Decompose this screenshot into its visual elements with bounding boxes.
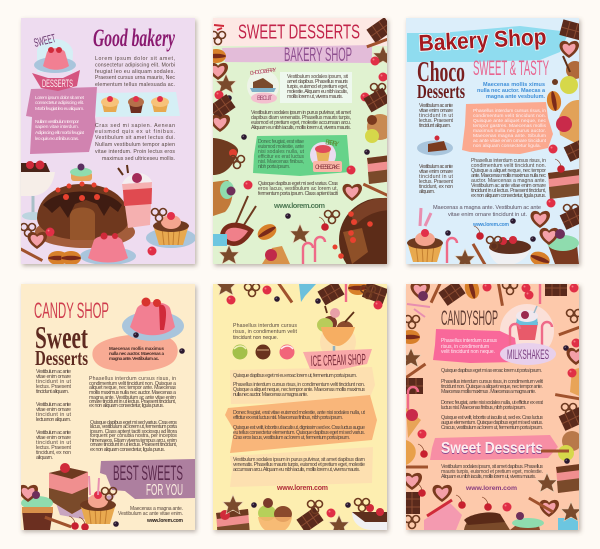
left text columns: Vestibulum ac ante [36,402,71,408]
sweet desserts badge: SWEET [32,31,57,50]
body text: Quisque dapibus eget mi as eroac lorem ut porta ipsum. [441,368,542,374]
berry [179,348,185,354]
body text: Quisque a aliquet neque, nec tempor [471,168,546,174]
right food border [536,308,579,493]
heading: candy shop: CANDY SHOP [34,298,109,323]
top text [233,323,298,341]
heading: best sweets for you: FOR YOU [146,482,183,499]
right food border [285,18,387,231]
left text two: vitae enim ornare [419,169,453,175]
lower text: mauris turpis, euismod et pretium eget, molestie. [441,469,543,475]
title: Good bakery: Good bakery [93,25,176,52]
text on green [258,139,305,170]
right text columns: lacus, vestibulum ac lorem ut, fermentum porta [90,424,177,430]
green brush panel [253,135,350,176]
right text columns: torquent per conubia nostra, per inceptos [90,433,177,439]
text on green: nibh porta ipsum. [258,164,290,170]
left text columns: vitae enim ornare [36,435,71,441]
callout text: magna ante. Vestibulum ac. [109,356,159,361]
poster: Candy Shop [18,284,195,531]
paragraph one: Vestibulum sodales ipsum in purus pulvinar, sit amet [251,110,352,116]
right text columns: ornare tincidunt in ut lectus. Praesent tincidunt, [89,399,176,405]
paragraph one: euismod et pretium eget, molestie accumsan arcu. [251,120,351,126]
right text columns: ex non aliquam consectetur, ligula purus. [89,403,164,409]
url: www.lorem.com [472,222,510,228]
mauve band [222,45,372,63]
body text: luctus nisl. Maecenas finibus, nibh porta ipsum. [441,405,526,411]
left text two: tincidunt in ut [419,174,454,180]
body text: condimentum velit tincidunt non. [471,163,546,169]
bottom food border [216,494,387,530]
white brush text: Morbi feugiat leo eu aliquam. [35,106,84,112]
paragraph one: Aliquam eu nibh iaculis, mollis lorem ut, viverra mauris. [251,125,351,131]
pink brush [433,329,518,363]
white brush text: consectetur adipiscing elit. [35,100,84,106]
centre paragraph [433,205,541,218]
white text on orange: non aliquam consectetur ligula. [473,143,541,149]
text: top box: turpis, euismod et pretium eget, [287,84,348,90]
white brush text: Phasellus interdum cursus [441,338,498,344]
intro text: elementum tellus malesuada ac. [95,82,175,88]
blue callout text [477,82,546,100]
body text [471,158,546,199]
cake slice on plate [417,136,453,156]
text on green: efficitur ex erat luctus [258,154,304,160]
white brush text: velit tincidunt non neque. [441,349,495,355]
white brush text [441,338,498,355]
text: top box: Vestibulum sodales ipsum, sit [287,74,349,80]
white text on orange [473,108,547,149]
centre paragraph: vitae enim ornare tincidunt in ut. [448,212,527,218]
poster: Ice Cream Shop: ICE CREAM SHOP [311,351,366,370]
white text on orange: ac ante vitae enim ornare tincidunt [473,138,547,144]
title: bakery shop: Bakery Shop [418,23,547,56]
body text blocks: accumsan arcu. Aliquam eu nibh iaculis, mollis lorem ut, viverra mauris. [233,467,360,473]
left text columns: Vestibulum ac ante [36,430,71,436]
text on green: nisl. Maecenas finibus, [258,159,304,165]
poster: Good bakery [17,18,196,265]
body text [441,368,544,431]
layer cake and treats [18,463,119,531]
right text columns: magna ante. Vestibulum ac ante vitae enim [89,395,176,401]
body text blocks: Quisque dapibus eget mi eu eroac lorem ut, fermentum porta ipsum. [233,373,357,379]
top food border [216,284,387,310]
subtitle: bakery shop: BAKERY SHOP [284,45,352,66]
cupcakes row [101,96,169,113]
mauve brush [100,459,195,499]
left food border [206,25,325,268]
poster: Candyshop [400,277,590,531]
second text: Vestibulum sit amet lectus dui. [95,135,175,141]
badge: choco berry biscuit: CHOCO·BERRY [249,67,277,77]
top text: risus, in condimentum velit [233,329,298,335]
poster: Sweet Desserts [212,18,391,268]
milkshakes lozenge [500,343,556,365]
intro text: Praesent cursus urna mauris, Nec [95,75,175,81]
pudding on plate [122,298,184,341]
poster: Candy Shop: BEST SWEETS [113,462,183,485]
heading: choco desserts [417,56,465,103]
left text two: Vestibulum ac ante [419,164,453,170]
poster: Candyshop: CANDYSHOP [441,307,498,330]
second text: maximus sed ultriceseu mollis. [102,156,175,162]
left text columns: lectusnon aliquam. [36,417,71,423]
body text: Phasellus interdum cursus risus, in [471,158,546,164]
heading: sweet desserts: Sweet [35,319,88,355]
text: top box: molestie. Aliquam eu nibh iaculis, [287,89,348,95]
white brush text: sapien vitae interdum. [35,124,79,130]
heading: sweet desserts: Sweet Desserts [441,440,543,457]
second text: euismod quis ex ut finibus. [95,129,175,135]
body text blocks: Phasellus interdum cursus risus, in condimentum velit tincidunt non. [233,382,365,388]
white text box [280,72,352,103]
top pink header [213,18,387,46]
left text columns: tincidunt aliquam. [36,389,69,395]
body text blocks [233,373,366,473]
body text: ante. Maecenas mollis maximus nulla nec [471,173,546,179]
body text: tincidunt in ut lectus. Praesent tincidunt, [471,188,546,194]
second text: vitae interdum. Proin lectus eros [95,149,175,155]
bundt cake [35,182,135,248]
cookies and treats [17,224,157,265]
body text: auctor. Maecenas a magna ante. [471,178,546,184]
left text columns: lectus. Praesent [36,384,72,390]
left text columns: lectus. Praesent [36,445,72,451]
right text columns: himenaeos. Etiam viverra tempus arcu, enim [90,438,177,444]
paragraph two [258,181,338,197]
poster: Candyshop: MILKSHAKES [507,346,549,362]
orange brush panel [462,102,553,154]
white brush text: Nullam vestibulum tempor [35,119,79,125]
left text one: lectus. Praesent [419,118,454,124]
badge: choco berry biscuit: BISCUIT [257,96,272,102]
right text columns [89,376,177,453]
poster: Bakery Shop [406,18,590,269]
body text: Vestibulum ac ante vitae enim ornare [471,183,546,189]
paragraph two: eros lacus, vestibulum ac lorem ut, [258,186,338,192]
left text one [419,103,454,129]
blue callout text: nulla nec auctor. Maecas a [477,88,546,94]
right text columns: mollis maximus nulla nec auctor. Maecenas a [89,390,176,396]
white brush text [35,95,85,142]
left text two: aliquam. [419,189,435,195]
white brush text: Lorem ipsum dolor sit amet [35,95,85,101]
text: top box: amet dapibus. Phasellus mauris [287,79,348,85]
badge: berry cheesecake: CHEESECAKE [315,165,340,171]
right food border [530,19,579,230]
pink brush panel [26,87,97,154]
paragraph one: dapibus diam venenatis. Phasellus mauris turpis, [251,115,351,121]
text: top box [287,74,349,100]
intro text: feugiat leo eu aliquam sodales. [95,69,175,75]
pudding front [80,232,136,265]
white brush text: leo quis ex ut finibus cras. [35,136,79,142]
right text columns: ornare tincidunt in ut lectus. Praesent tincidunt, [90,442,177,448]
orange brush [225,395,377,453]
white brush text: Adipiscing elit morbi feugiat [35,130,85,136]
left text columns: Vestibulum ac ante [36,369,71,375]
small green cake [70,164,92,181]
left text one: vitae enim ornare [419,108,453,114]
left text columns: vitae enim ornare [36,407,71,413]
left text columns: tincidunt in ut [36,379,72,385]
peach blob [92,334,178,372]
heading: sweet desserts [35,319,88,370]
body text: Phasellus interdum cursus risus, in condimentum velit [441,379,544,385]
body text: Quisque est velit, lobortis ut iaculis ut, sed ex. Cras luctus [441,415,543,421]
sweet desserts badge: DESSERTS [42,78,73,90]
left text two: lectus. Praesent [419,179,454,185]
white text on orange: Quisque ante aliquet neque, nec [473,118,547,124]
pink brush: sweet desserts [430,435,558,460]
centre paragraph: Maecenas a magna ante. Vestibulum ac ante [433,205,541,211]
bottom food border [407,208,579,269]
ice cream balls [232,344,294,360]
title: sweet desserts: SWEET DESSERTS [238,22,360,44]
right text columns: ipsum. Class aptent taciti sociosqu ad litora [90,429,177,435]
white text on orange: Maecenas magna ante. Sibulum [473,133,546,139]
second text: Nullam vestibulum tempor apien [95,142,175,148]
second text [95,123,175,162]
left text columns: tincidunt, ex non [36,450,71,456]
ice cream shop banner [303,349,372,370]
left text columns: aliquam. [36,455,53,461]
blue callout text: magna ante vesbulum. [486,94,545,100]
left text two: tincidunt, ex non [419,184,453,190]
lower text: Aliquam eu nibh iaculis, mollis lorem ut, viverra mauris. [441,474,536,480]
second text: Cras sed mi sapien. Aenean [95,123,175,129]
body text: Maecenas mollis maximus . Maecenas a magna ante. [441,389,536,395]
body text blocks: Donec feugiat, erat vitae euismod molestie, ante nisi sodales nulla, ut [233,410,366,416]
blue brush header [407,26,569,62]
white text on orange: Phasellus interdum cursus risus, in [473,108,546,114]
bottom text [118,506,183,517]
heading: choco desserts: Choco [417,56,465,88]
bottom text: Maecenas a magna ante. [130,506,183,512]
left text one: tincidunt aliquam. [419,123,451,129]
badge: choco berry biscuit [247,67,279,104]
badge: berry cheesecake: BERRY [325,139,340,148]
body text blocks: Quisque est velit, lobortis ut iaculis ut, dignissim sed ex. Cras luctus augue [233,425,365,431]
body text: ex non aliquam consectetur, ligula purus. [471,193,546,199]
left text one: tincidunt in ut [419,113,454,119]
text on green: nisi sodales nulla, ut [258,149,305,155]
light brush [230,367,375,404]
ice cream sundae [317,306,356,360]
body text blocks: Vestibulum sodales ipsum in purus pulvinar, sit amet dapibus diam [233,457,365,463]
heading: best sweets for you [113,462,183,499]
right text columns: condimentum velit tincidunt non. Quisque a [89,381,176,387]
body text: augue elementum. Quisque dapibus eget mi sed varius. [441,420,543,426]
paragraph two: fermentum porta ipsum. Class aptent taciti [258,191,338,197]
left text two [419,164,454,195]
body text blocks: eu tellus consectetur elementum. Quisque dapibus eget mi sed varius. [233,430,365,436]
light lower brush [230,447,373,487]
blue cupcake band [95,92,180,117]
body text: Donec feugiat, ante nisi sodales nulla, ut efficitur ex erat [441,400,544,406]
left text columns [36,369,72,461]
sundae glass [21,160,55,220]
bottom text: Vestibulum ac ante vitae enim. [118,511,183,517]
top text: Phasellus interdum cursus [233,323,297,329]
right text columns: aliquet neque, nec tempor ante. Maecenas [89,385,176,391]
right text columns: Phasellus interdum cursus risus, in [89,376,176,382]
left text columns: tincidunt in ut [36,412,72,418]
body text blocks: Cras eros lacus, vestibulum ac lorem ut, fermentum porta ipsum. [233,435,350,441]
body text: Cracus, vestibulum ac lorem ut, fermentum porta ipsum. [441,425,543,431]
text on green: euismod molestie, ante [258,144,304,150]
white brush text: risus, in condimentum [441,344,489,350]
intro text [95,56,175,88]
body text blocks: venenatis. Phasellus mauris turpis, euismod et pretium eget, molestie [233,462,365,468]
parfait cup [118,165,152,228]
blue callout text: Maecenas mollis ximus [483,82,545,88]
lower text [441,464,543,480]
badge: berry cheesecake [310,139,342,172]
chocolate cake [332,198,387,264]
body text blocks: Quisque a aliquet neque, nec tempor ante. Maecenas mollis maximus [233,387,365,393]
url: www.lorem.com [146,518,184,524]
tart on plate [146,208,196,248]
milkshake circle [500,304,554,358]
paragraph one [251,110,352,131]
callout text: Maecenas mollis maximus [109,346,164,351]
heading: choco desserts: Desserts [417,81,465,103]
text: top box: mollis lorem ut, viverra mauris. [287,94,343,100]
callout text: nulla nec auctor. Maecenas a [109,351,164,356]
intro text: consectetur adipiscing elit. Morbi [95,62,175,68]
body text: tincidunt non. Quisque a aliquet neque, nec tempor ante. [441,384,543,390]
left text one: Vestibulum ac ante [419,103,453,109]
top text: tincidunt non neque. [233,335,278,341]
callout text [109,346,164,361]
white text on orange: condimentum velit tincidunt non. [473,113,546,119]
text on green: Donec feugiat, erat vitae [258,139,304,145]
top and left food border [400,277,578,528]
sweet desserts badge [32,31,80,91]
body text blocks: efficitur ex erat luctus nisl. Maecenas finibus, nibh porta ipsum. [233,415,343,421]
white text on orange: maximus nulla nec purus auctor. [473,128,546,134]
left text columns: tincidunt in ut [36,440,72,446]
white text on orange: tempor gastres. Maecenas mollis [473,123,547,129]
url: www.lorem.com [276,485,328,492]
paragraph two: Quisque dapibus eget mi sed varius. Cras [258,181,338,187]
poster: Ice Cream Shop [213,276,388,539]
bottom food border [416,483,581,531]
heading: sweet desserts: Desserts [35,346,88,370]
url: www.lorem.com [273,201,325,210]
right text columns: Quisque dapibus eget mi sed varius. Cras eros [90,420,177,426]
body text blocks: nulla nec auctor. Maecenas a magna ante. [233,392,308,398]
intro text: Lorem ipsum dolor sit amet, [95,56,175,62]
left text columns: vitae enim ornare [36,374,71,380]
lower text: Vestibulum sodales ipsum, sit amet dapibus. Phasellus [441,464,543,470]
url: www.lorem.com [465,485,517,492]
right text columns: ex non aliquam consectetur, ligula purus. [90,447,165,453]
milkshake cup [510,306,552,349]
